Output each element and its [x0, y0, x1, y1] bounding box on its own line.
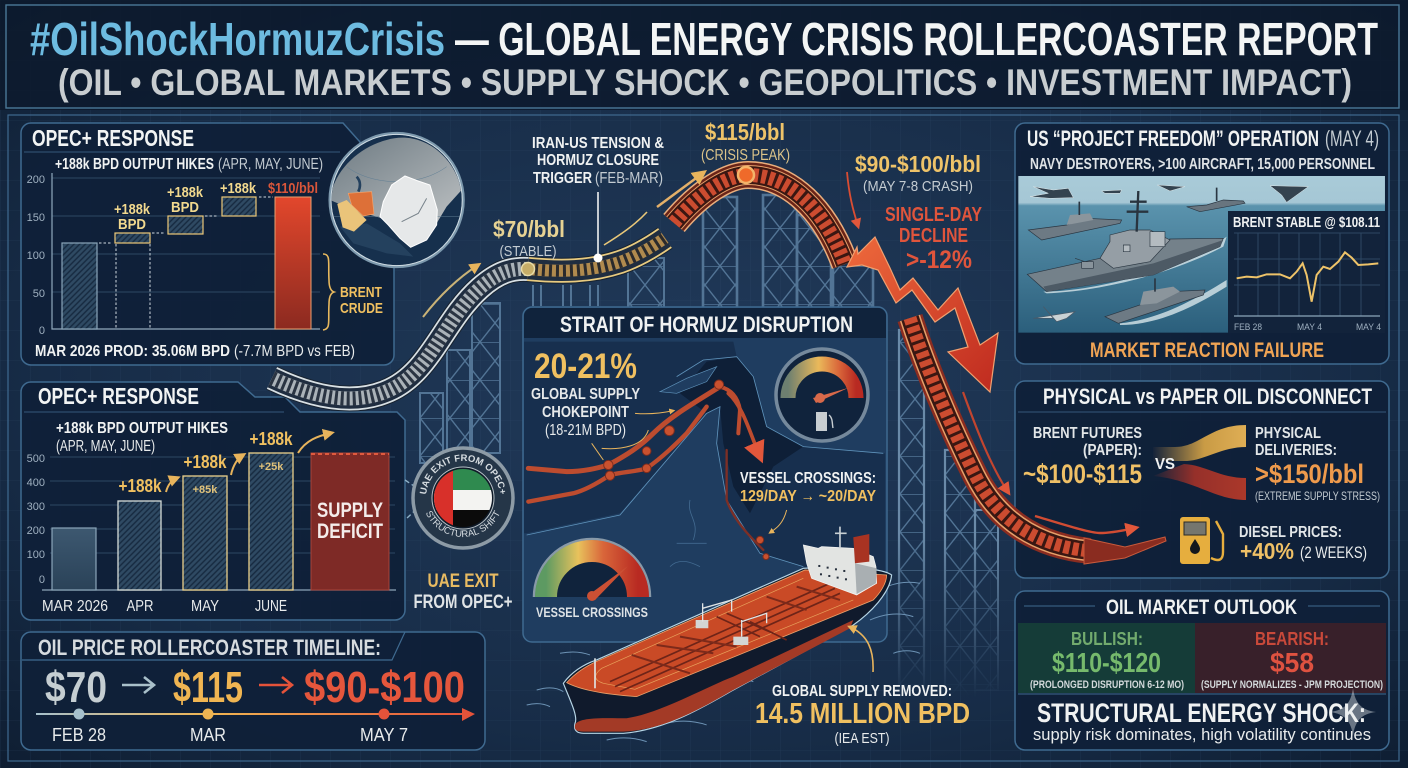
title: #OilShockHormuzCrisis: [30, 13, 445, 65]
chart: monthly bars: +85k: [193, 484, 218, 496]
chart: monthly bars: MAR 2026: [42, 598, 108, 615]
illustration: naval fleet: [1018, 176, 1385, 333]
chart: waterfall bars: 200: [27, 174, 45, 186]
callout arrows: [592, 411, 787, 533]
bearish scenario: $58: [1270, 647, 1314, 678]
label: Iran-US trigger: HORMUZ CLOSURE: [537, 152, 659, 169]
chart: monthly bars: SUPPLY: [317, 499, 383, 522]
brace: Brent crude: BRENT: [340, 284, 382, 301]
label: $90-$100 crash: (MAY 7-8 CRASH): [863, 178, 973, 195]
physical price: [1255, 425, 1380, 503]
chart: monthly bars: +188k: [184, 452, 227, 472]
physical price: DELIVERIES:: [1255, 442, 1337, 459]
bearish scenario: [1195, 623, 1386, 693]
production note: (-7.7M BPD vs FEB): [234, 343, 355, 360]
heading: (MAY 4): [1325, 126, 1379, 151]
Arabia: [337, 200, 367, 232]
heading: OPEC+ RESPONSE: [32, 125, 194, 151]
paper price: BRENT FUTURES: [1033, 425, 1142, 442]
chart: monthly bars: APR: [126, 598, 154, 615]
map: [524, 342, 885, 577]
chokepoint stats: [531, 347, 640, 439]
superstructure: [803, 545, 877, 595]
arrows along the ride: [423, 172, 858, 317]
title: [30, 13, 1378, 65]
chart: monthly bars: MAY: [191, 598, 219, 615]
chokepoint stats: CHOKEPOINT: [542, 404, 629, 421]
label: single-day decline: [885, 204, 983, 274]
chart: monthly bars: [27, 429, 396, 615]
conclusion: supply risk dominates, high volatility continues: [1033, 725, 1371, 744]
physical price: PHYSICAL: [1255, 425, 1321, 442]
subheading: (APR, MAY, JUNE): [218, 156, 323, 173]
chart: waterfall bars: +188k: [220, 180, 257, 197]
label: Iran-US trigger: IRAN-US TENSION &: [532, 135, 664, 152]
arrows: [166, 433, 331, 492]
gauge: supply: [776, 349, 868, 441]
deck equipment: [696, 620, 748, 645]
UAE exit label: [414, 571, 512, 613]
timeline axis: MAY 7: [360, 725, 408, 745]
chokepoint stats: GLOBAL SUPPLY: [531, 386, 640, 403]
callout: global supply removed: (IEA EST): [834, 730, 890, 747]
main destroyer: [1027, 238, 1223, 292]
heading: OIL PRICE ROLLERCOASTER TIMELINE:: [38, 635, 381, 660]
label: $70 stable: $70/bbl: [493, 216, 565, 242]
diesel prices: [1239, 524, 1367, 564]
white highlighted region: [380, 176, 437, 247]
bullish scenario: BULLISH:: [1071, 629, 1143, 649]
icon: UAE exit badge: STRUCTURAL SHIFT: [426, 510, 500, 538]
diesel prices: +40%: [1240, 538, 1294, 564]
vessel crossings note: VESSEL CROSSINGS:: [740, 470, 876, 487]
price sequence: [45, 663, 465, 712]
chart: waterfall bars: 100: [27, 250, 45, 262]
icon: UAE exit badge: [404, 446, 515, 550]
brace: Brent crude: CRUDE: [340, 300, 383, 317]
UAE exit label: FROM OPEC+: [414, 592, 512, 613]
paper price: [1023, 425, 1142, 489]
chart: waterfall bars: +188k: [114, 201, 151, 218]
label: single-day decline: SINGLE-DAY: [885, 204, 983, 226]
escort ships: [1028, 218, 1122, 240]
chart: monthly bars: 500: [27, 453, 45, 465]
paper price: ~$100-$115: [1023, 459, 1142, 489]
header banner: [0, 0, 1408, 110]
panel: OPEC+ response waterfall: [21, 123, 394, 365]
price sequence: $90-$100: [304, 663, 465, 712]
chart: monthly bars: 100: [27, 549, 45, 561]
label: $115 crisis peak: (CRISIS PEAK): [701, 147, 790, 164]
Iran: [348, 192, 374, 216]
label: $90-$100 crash: [855, 151, 981, 195]
chokepoint stats: (18-21M BPD): [545, 422, 626, 439]
vessel crossings note: 129/DAY → ~20/DAY: [740, 488, 876, 505]
chart: waterfall bars: 50: [33, 288, 45, 300]
UAE exit label: UAE EXIT: [428, 571, 499, 592]
wakes: [1043, 237, 1227, 293]
chart: monthly bars: +188k: [118, 476, 162, 496]
UAE flag: [434, 469, 492, 527]
chart: monthly bars: JUNE: [255, 598, 287, 615]
chart: waterfall bars: +188k: [167, 184, 204, 201]
gauge: vessel crossings: [534, 539, 650, 620]
illustration: oil tanker: [527, 527, 920, 742]
diesel prices: DIESEL PRICES:: [1239, 524, 1342, 541]
icon: globe with Gulf highlighted: [330, 133, 463, 267]
aircraft: [1030, 185, 1308, 202]
callout: global supply removed: [755, 627, 970, 747]
inset chart: Brent stable: FEB 28: [1234, 322, 1262, 333]
label: $115 crisis peak: [701, 119, 790, 164]
chokepoint stats: 20-21%: [534, 347, 637, 386]
chart: monthly bars: DEFICIT: [317, 520, 383, 543]
crash descent: [910, 318, 1166, 564]
track nodes: [522, 167, 754, 276]
timeline axis: MAR: [190, 725, 226, 745]
chart: waterfall bars: [27, 173, 320, 337]
flow diagram: [1153, 425, 1246, 500]
shipping routes: [528, 387, 763, 550]
heading: OPEC+ RESPONSE: [38, 383, 199, 409]
icon: crash lightning arrow: [847, 237, 998, 392]
panel: oil price rollercoaster timeline: [21, 632, 485, 750]
conclusion: [1033, 698, 1371, 744]
chart: monthly bars: 0: [39, 574, 45, 586]
chart: waterfall bars: 0: [39, 325, 45, 337]
heading: OIL MARKET OUTLOOK: [1106, 595, 1297, 619]
inset chart: Brent stable: MAY 4: [1297, 322, 1322, 333]
label: $70 stable: [493, 216, 565, 260]
crisis peak arc: [674, 175, 845, 264]
diesel prices: (2 WEEKS): [1300, 544, 1367, 562]
timeline axis: FEB 28: [52, 725, 106, 745]
panel: US Project Freedom operation: [1015, 123, 1389, 364]
callout: global supply removed: GLOBAL SUPPLY REMOVED:: [772, 683, 952, 700]
bullish scenario: $110-$120: [1052, 647, 1161, 678]
stable section: [272, 269, 528, 399]
subheading: +188k BPD OUTPUT HIKES: [56, 420, 228, 437]
label: $70 stable: (STABLE): [500, 243, 556, 260]
rising section: [528, 238, 665, 271]
panel: physical vs paper oil disconnect: [1015, 381, 1389, 578]
label: $90-$100 crash: $90-$100/bbl: [855, 151, 981, 177]
bullish scenario: [1018, 623, 1195, 693]
paper price: (PAPER):: [1083, 442, 1142, 459]
subheading: [56, 420, 228, 455]
heading: STRAIT OF HORMUZ DISRUPTION: [560, 312, 853, 337]
icon: fuel pump: [1180, 517, 1223, 564]
chart: waterfall bars: 150: [27, 212, 45, 224]
label: $115 crisis peak: $115/bbl: [705, 119, 785, 145]
panel: Strait of Hormuz disruption: [523, 307, 887, 642]
price sequence: $70: [45, 663, 107, 712]
hull: [563, 567, 892, 733]
chart: waterfall bars: $110/bbl: [268, 181, 318, 197]
label: Iran-US trigger: [532, 135, 664, 262]
bearish scenario: BEARISH:: [1255, 629, 1329, 649]
waves: [527, 582, 920, 742]
inset chart: Brent stable: [1228, 211, 1385, 333]
physical price: >$150/bbl: [1255, 459, 1364, 489]
bullish scenario: (PROLONGED DISRUPTION 6-12 MO): [1030, 679, 1184, 691]
sparkle watermark: [1330, 688, 1376, 736]
deck: [567, 570, 887, 697]
price sequence: $115: [173, 663, 243, 712]
chart: monthly bars: +25k: [259, 461, 284, 473]
roller coaster support trusses: [420, 195, 998, 710]
chart: monthly bars: +188k: [250, 429, 293, 449]
roller coaster track: [272, 175, 1166, 564]
chart: monthly bars: 300: [27, 501, 45, 513]
production note: MAR 2026 PROD: 35.06M BPD: [35, 343, 230, 360]
chart: waterfall bars: BPD: [118, 216, 146, 233]
callout: global supply removed: 14.5 MILLION BPD: [755, 698, 970, 730]
inset chart: Brent stable: MAY 4: [1356, 322, 1381, 333]
chart: monthly bars: 200: [27, 525, 45, 537]
icon: UAE exit badge: UAE EXIT FROM OPEC+: [420, 454, 506, 494]
callout: market reaction failure: MARKET REACTION FAILURE: [1090, 339, 1324, 362]
brace: Brent crude: [323, 254, 383, 330]
flow diagram: VS: [1155, 456, 1175, 473]
panel: OPEC+ response bars: [21, 382, 405, 620]
subheading: +188k BPD OUTPUT HIKES: [55, 156, 214, 173]
subheading: (APR, MAY, JUNE): [56, 438, 155, 455]
gauge: vessel crossings: VESSEL CROSSINGS: [536, 604, 648, 620]
vessel crossings note: [740, 470, 876, 505]
chart: waterfall bars: BPD: [171, 199, 199, 216]
chart: monthly bars: 400: [27, 477, 45, 489]
label: Iran-US trigger: (FEB-MAR): [595, 170, 663, 187]
label: single-day decline: >-12%: [906, 246, 972, 274]
panel: oil market outlook: [1015, 591, 1389, 750]
label: Iran-US trigger: TRIGGER: [533, 170, 592, 187]
label: single-day decline: DECLINE: [899, 225, 968, 247]
timeline axis: [36, 708, 475, 745]
